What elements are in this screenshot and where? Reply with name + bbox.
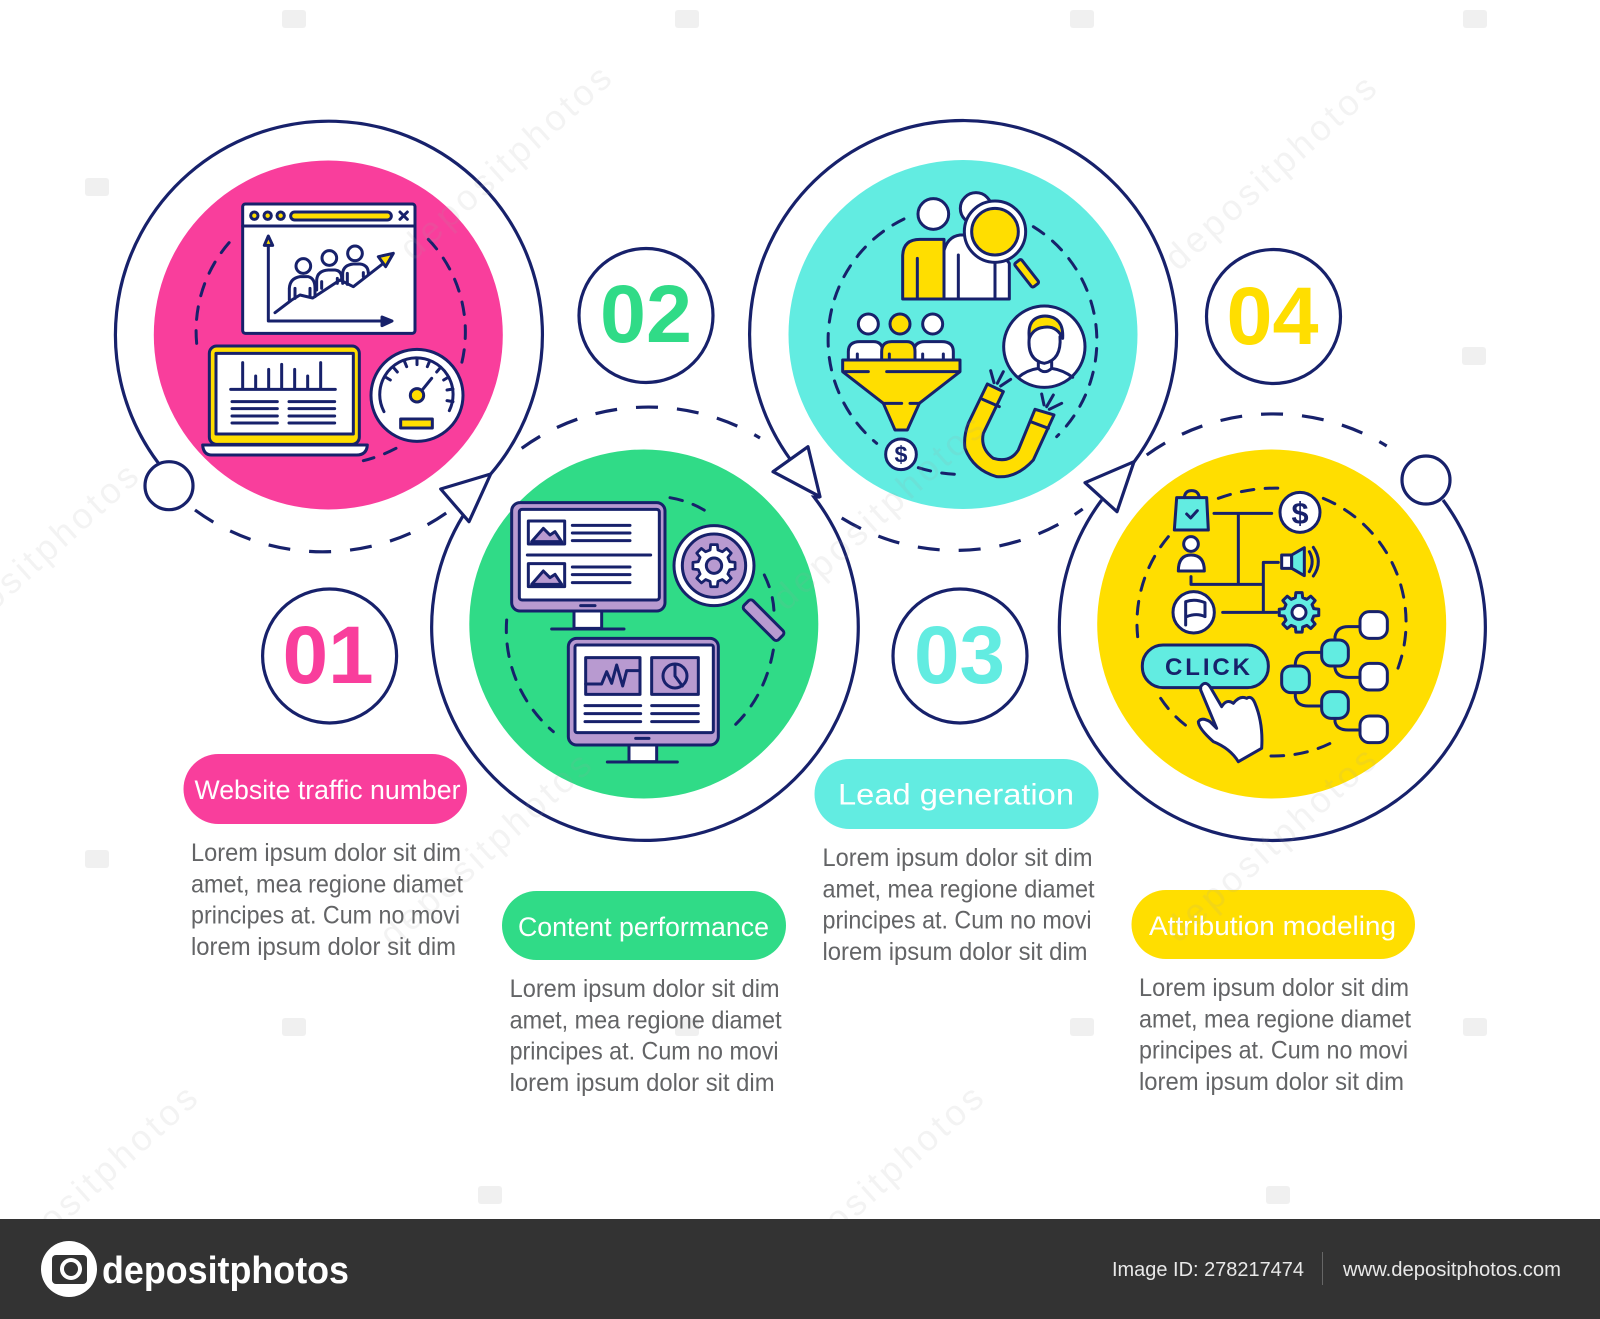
text block: step 1: lorem ipsum dolor sit dim (191, 933, 456, 961)
click button: CLICK (1165, 654, 1251, 681)
top monitor (512, 503, 665, 629)
number badge 04: 04 (1226, 271, 1319, 362)
icon: attribution modeling (1137, 488, 1406, 762)
flag badge (1173, 592, 1214, 633)
step 2 colored disc (469, 450, 818, 798)
heading pill: Website traffic number (184, 754, 467, 824)
gear (1279, 593, 1319, 632)
dollar coin: $ (1291, 496, 1309, 530)
footer bar (0, 1219, 1600, 1319)
number badge 02: 02 (600, 269, 692, 360)
watermarks: depositphotos (1156, 739, 1384, 950)
number badge 03: 03 (914, 610, 1005, 701)
laptop with bar chart (203, 346, 367, 455)
speedometer gauge (371, 349, 463, 441)
click button (1142, 645, 1268, 688)
customer avatar (1004, 306, 1085, 387)
text block: step 2: amet, mea regione diamet (510, 1006, 782, 1034)
text block: step 3: principes at. Cum no movi (822, 907, 1092, 935)
text block: step 3: Lorem ipsum dolor sit dim (822, 844, 1092, 872)
start node circle (145, 462, 193, 510)
text block: step 1: principes at. Cum no movi (191, 902, 460, 930)
icon: lead generation (828, 193, 1097, 477)
number badge 04 (1206, 250, 1340, 384)
arrow head 1 (441, 474, 491, 522)
faint stock camera marks (85, 10, 1487, 1204)
arrow head 2 (773, 447, 820, 497)
heading pill: Attribution modeling: Attribution modeling (1149, 911, 1396, 941)
text block: step 3: amet, mea regione diamet (822, 875, 1095, 903)
pointing hand (1198, 683, 1262, 762)
heading pill: Content performance (502, 891, 786, 960)
number badge 01: 01 (283, 610, 374, 701)
number badge 02 (579, 248, 713, 382)
magnet (965, 371, 1062, 477)
footer website: www.depositphotos.com (1342, 1259, 1561, 1281)
watermarks: depositphotos (371, 744, 599, 955)
text block: step 3: lorem ipsum dolor sit dim (822, 938, 1088, 966)
text block: step 4: lorem ipsum dolor sit dim (1139, 1068, 1404, 1096)
arrow head 3 (1085, 462, 1134, 512)
heading pill: Content performance: Content performance (518, 912, 769, 942)
user (1178, 537, 1204, 571)
text block: step 4: Lorem ipsum dolor sit dim (1139, 974, 1409, 1002)
end node circle (1402, 456, 1450, 504)
text block: step 1: amet, mea regione diamet (191, 870, 463, 898)
watermarks: depositphotos (763, 1077, 991, 1288)
bottom monitor (568, 638, 718, 762)
loudspeaker (1282, 547, 1318, 576)
number badge 01 (263, 589, 397, 723)
dollar coin (1280, 492, 1320, 532)
text block: step 1: Lorem ipsum dolor sit dim (191, 839, 461, 867)
funnel with people and dollar: $ (895, 442, 908, 468)
heading pill: Lead generation (814, 759, 1098, 829)
browser window with chart (243, 204, 415, 333)
heading pill: Lead generation: Lead generation (838, 778, 1074, 812)
text block: step 4: principes at. Cum no movi (1139, 1037, 1408, 1065)
heading pill: Attribution modeling (1132, 890, 1415, 959)
text block: step 2: lorem ipsum dolor sit dim (510, 1069, 775, 1097)
watermarks: depositphotos (391, 57, 619, 268)
footer brand name: depositphotos (102, 1250, 349, 1292)
icon: content performance (506, 498, 785, 762)
number badge 03 (893, 589, 1027, 723)
footer logo mark (41, 1241, 97, 1297)
watermarks: depositphotos (764, 407, 992, 618)
connector lines (1191, 513, 1278, 612)
icon: website traffic (196, 204, 465, 461)
step 4 colored disc (1097, 450, 1446, 798)
magnifier with gear (674, 526, 785, 642)
heading pill: Website traffic number: Website traffic number (194, 775, 461, 805)
footer image id: Image ID: 278217474 (1112, 1259, 1304, 1281)
text block: step 2: Lorem ipsum dolor sit dim (510, 975, 780, 1003)
two people under magnifier (903, 193, 1039, 299)
watermarks: depositphotos (1156, 67, 1384, 278)
step 1 colored disc (154, 160, 503, 510)
attribution tree (1282, 612, 1387, 743)
funnel with people and dollar (843, 314, 960, 470)
step 3 colored disc (788, 160, 1138, 509)
shopping bag (1174, 491, 1208, 530)
text block: step 2: principes at. Cum no movi (510, 1038, 779, 1066)
text block: step 4: amet, mea regione diamet (1139, 1005, 1411, 1033)
ring path with arrows connecting the four steps (115, 121, 1485, 840)
